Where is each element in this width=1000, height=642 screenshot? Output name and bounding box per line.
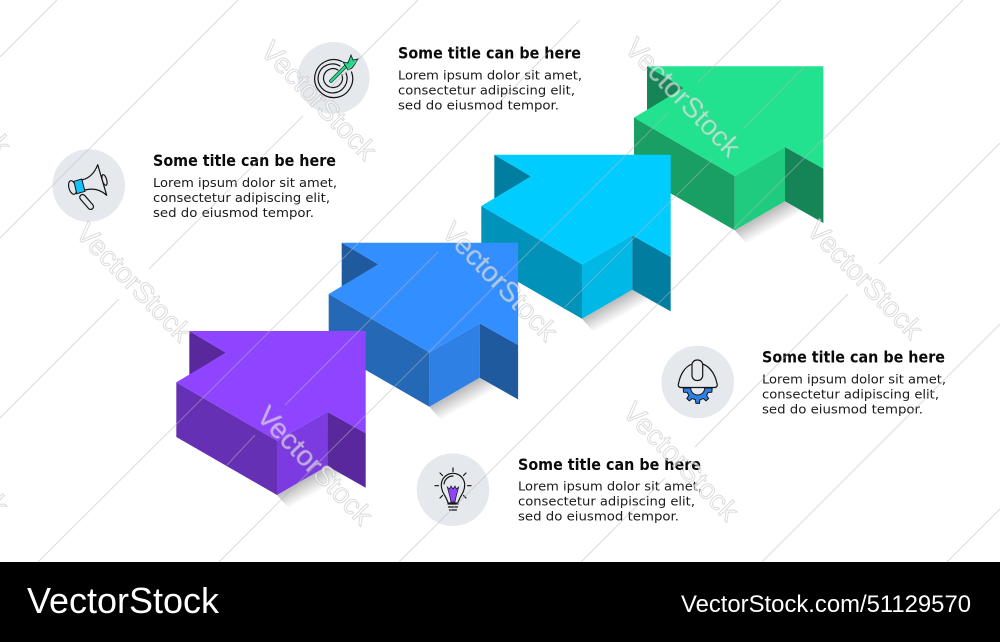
text block: right item: Some title can be here [762, 348, 945, 366]
text block: right item [762, 348, 946, 418]
watermark: repeated VectorStock text: VectorStock [619, 32, 747, 164]
text block: right item: Lorem ipsum dolor sit amet, [762, 372, 946, 388]
footer bar: VectorStock [27, 580, 220, 621]
text block: top item: Lorem ipsum dolor sit amet, [398, 68, 582, 84]
text block: left item: consectetur adipiscing elit, [153, 191, 330, 206]
text block: top item: consectetur adipiscing elit, [398, 84, 575, 98]
text block: top item: Some title can be here [398, 44, 581, 62]
text block: bottom item: Lorem ipsum dolor sit amet, [518, 480, 702, 494]
watermark: repeated VectorStock text: VectorStock [251, 400, 379, 532]
watermark: repeated VectorStock text: VectorStock [801, 214, 929, 346]
text block: bottom item [518, 455, 702, 524]
text block: right item: consectetur adipiscing elit, [762, 388, 939, 402]
arrow: cyan step [481, 155, 671, 336]
text block: right item: sed do eiusmod tempor. [762, 402, 923, 418]
arrow: blue step [329, 243, 518, 424]
watermark: repeated VectorStock text [0, 30, 1000, 532]
watermark: repeated VectorStock text: VectorStock [617, 396, 745, 528]
text block: left item: Lorem ipsum dolor sit amet, [153, 176, 337, 191]
footer bar: VectorStock.com/51129570 [681, 591, 971, 618]
icon: helmet with gear [661, 346, 734, 418]
footer bar [0, 562, 1000, 642]
icon: target with arrow [298, 42, 370, 114]
arrow: purple step [176, 331, 366, 512]
arrow: green step [634, 66, 823, 247]
text block: bottom item: sed do eiusmod tempor. [518, 510, 679, 524]
text block: top item [398, 44, 582, 114]
text block: left item: Some title can be here [153, 151, 336, 170]
text block: bottom item: consectetur adipiscing elit, [518, 494, 695, 510]
text block: left item: sed do eiusmod tempor. [153, 206, 314, 221]
watermark: repeated VectorStock text: VectorStock [70, 217, 198, 349]
icon: megaphone [52, 149, 125, 222]
text block: bottom item: Some title can be here [518, 455, 701, 474]
text block: left item [153, 151, 337, 221]
watermark: repeated VectorStock text: VectorStock [255, 35, 383, 167]
icon: light bulb [417, 453, 489, 526]
text block: top item: sed do eiusmod tempor. [398, 98, 559, 114]
watermark: repeated VectorStock text: VectorStock [436, 216, 564, 348]
